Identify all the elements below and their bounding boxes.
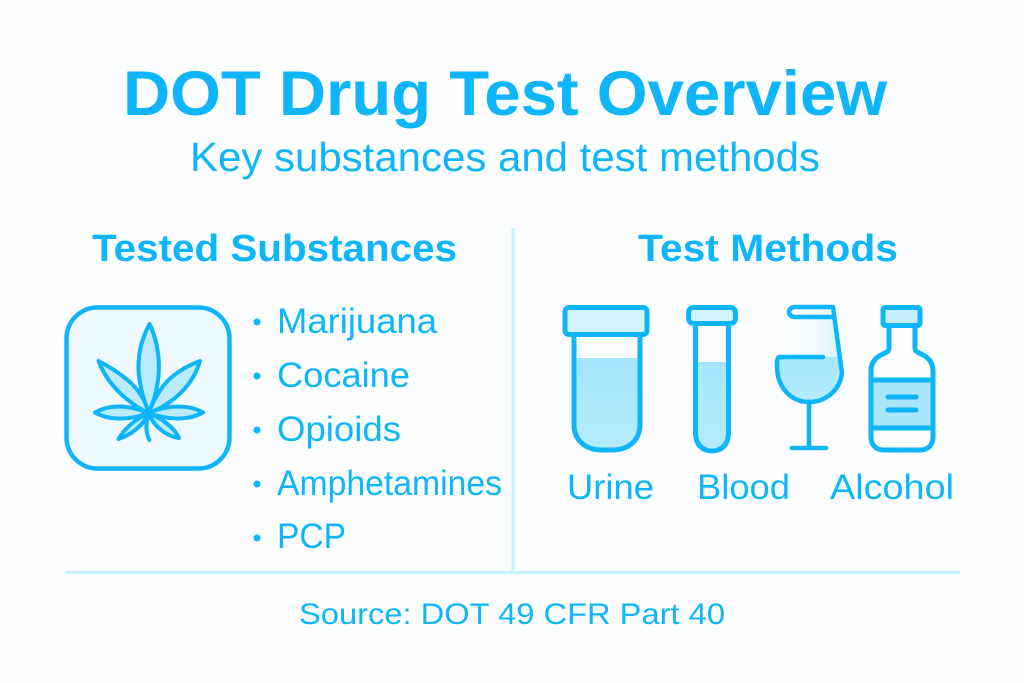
list: tested substances: PCP	[277, 517, 346, 556]
icon: blood tube	[688, 308, 736, 451]
label: alcohol: Alcohol	[830, 468, 954, 507]
heading: test methods: Test Methods	[638, 228, 898, 270]
heading: tested substances: Tested Substances	[92, 228, 457, 270]
label: urine: Urine	[567, 468, 654, 507]
list: tested substances: Opioids	[277, 410, 401, 449]
source note: Source: DOT 49 CFR Part 40	[299, 598, 725, 631]
icon: cannabis leaf	[66, 308, 230, 468]
icon: urine cup	[565, 308, 647, 450]
list: tested substances	[254, 302, 502, 556]
list: tested substances: Marijuana	[277, 302, 438, 341]
title: DOT Drug Test Overview	[123, 59, 888, 129]
icon: alcohol bottle	[871, 308, 933, 450]
list: tested substances: Amphetamines	[277, 464, 502, 503]
subtitle: Key substances and test methods	[190, 134, 820, 180]
label: blood: Blood	[697, 468, 790, 507]
icon: wine glass	[777, 307, 842, 448]
list: tested substances: Cocaine	[277, 356, 410, 395]
